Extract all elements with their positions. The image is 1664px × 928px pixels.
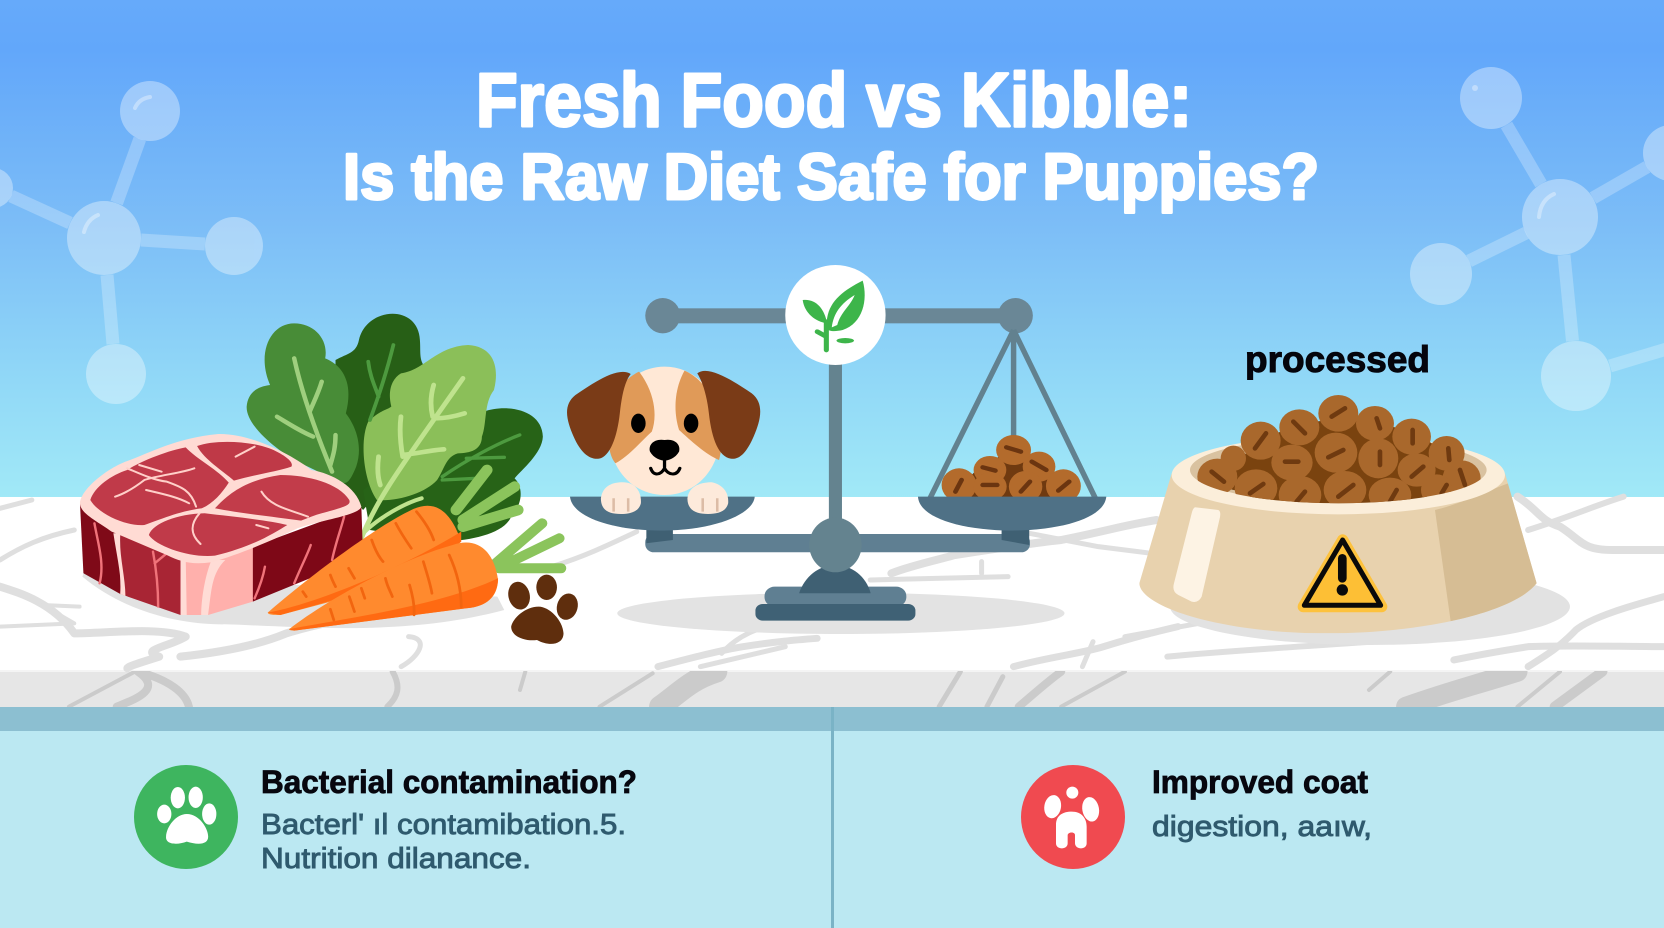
spinach: light leaf [364, 345, 496, 500]
right pan [918, 497, 1106, 531]
paw print [506, 575, 581, 644]
leaf veins and stems [277, 345, 520, 543]
food shadow [82, 563, 504, 628]
title [343, 58, 1319, 213]
bottom panel [0, 707, 1664, 928]
spinach: dark back leaf [336, 314, 428, 510]
label: processed: processed [1245, 339, 1430, 380]
spinach: left mid leaf [247, 323, 359, 483]
bowl highlight [1173, 507, 1220, 602]
text block: left risks: Bacterl' ıl contamibation.5. [261, 809, 626, 841]
leaf badge [785, 265, 886, 365]
food group: meat, greens, carrots, paw print [80, 314, 581, 644]
molecule: left [0, 81, 263, 404]
bowl shadow [1170, 568, 1570, 645]
meat: sides [80, 503, 120, 594]
meat: top [80, 434, 361, 563]
bowl body [1139, 474, 1536, 634]
kibble bowl [1133, 395, 1570, 645]
text block: left risks: Nutrition dilanance. [261, 843, 531, 875]
base [765, 587, 906, 607]
kibble in pan [942, 435, 1081, 503]
bottom beam [645, 534, 1030, 552]
spinach: right dark leaf [363, 408, 543, 542]
scale shadow [617, 593, 1064, 634]
molecule: right [1410, 67, 1664, 411]
sky background [0, 0, 1664, 498]
top beam [645, 298, 1033, 333]
hub [809, 518, 862, 572]
text block: left risks: Bacterial contamination? [261, 764, 637, 800]
balance scale [567, 265, 1106, 634]
kibble pile [1197, 395, 1481, 514]
marble countertop [0, 497, 1664, 707]
title: Is the Raw Diet Safe for Puppies? [343, 140, 1319, 213]
pan connectors [646, 528, 1029, 545]
text block: right benefits [1152, 764, 1372, 843]
icon: red paw [1021, 765, 1125, 869]
post [829, 363, 842, 527]
text block: right benefits: Improved coat [1152, 764, 1368, 800]
text block: left risks [261, 764, 637, 875]
pan strings [930, 330, 1095, 498]
warning icon [1303, 540, 1382, 607]
text block: right benefits: digestion, aaıw, [1152, 811, 1372, 843]
bowl rim [1172, 436, 1505, 514]
icon: green paw [134, 765, 238, 869]
carrots [268, 506, 461, 615]
carrot greens [456, 470, 561, 568]
puppy [567, 367, 760, 514]
left pan [570, 497, 755, 531]
title: Fresh Food vs Kibble: [476, 58, 1192, 143]
